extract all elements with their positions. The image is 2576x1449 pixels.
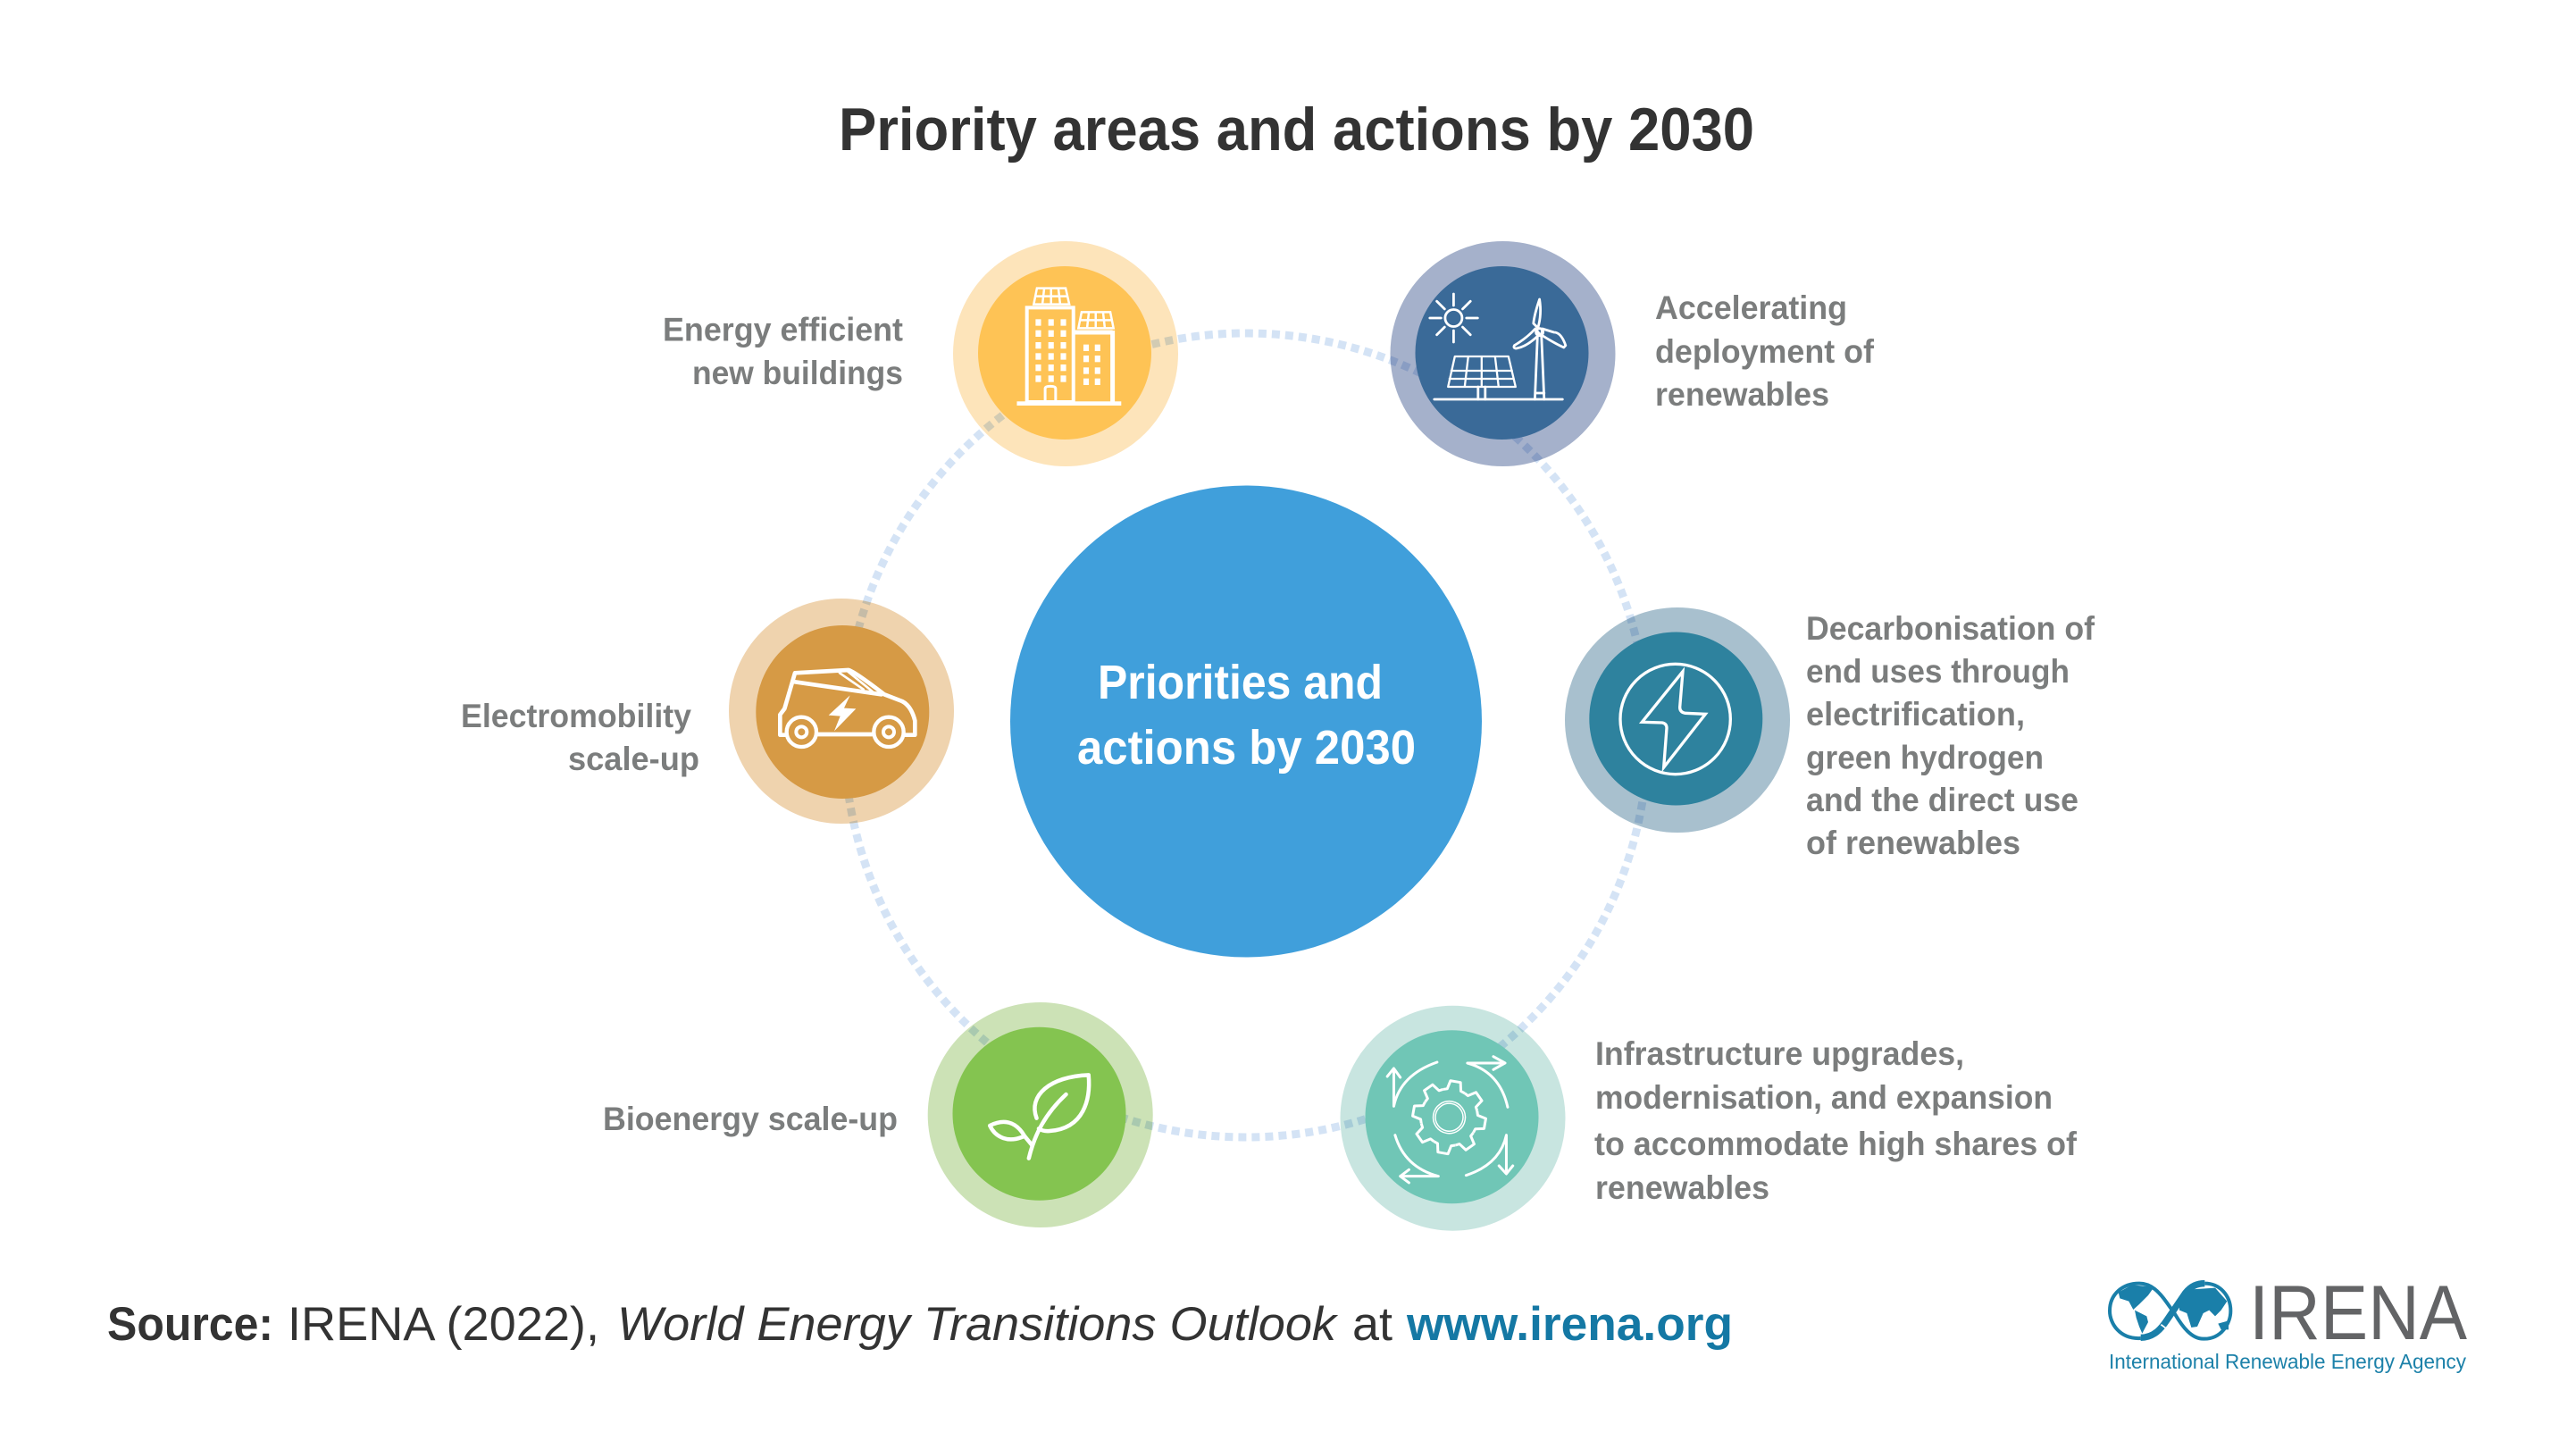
label: infrastructure upgrades: renewables xyxy=(1595,1169,1769,1206)
label: energy efficient new buildings: new buildings xyxy=(692,355,903,391)
source line: at xyxy=(1352,1298,1393,1351)
label: infrastructure upgrades: Infrastructure upgrades, xyxy=(1595,1035,1964,1072)
label: decarbonisation of end uses: green hydrogen xyxy=(1806,740,2044,775)
icon: electric car xyxy=(780,670,915,747)
source line: World Energy Transitions Outlook xyxy=(617,1298,1339,1351)
node: electromobility scale-up xyxy=(729,599,954,824)
label: infrastructure upgrades: modernisation, and expansion xyxy=(1595,1079,2053,1116)
source line xyxy=(107,1298,1733,1351)
label: decarbonisation of end uses: and the direct use xyxy=(1806,782,2078,818)
source line: www.irena.org xyxy=(1406,1298,1733,1351)
node: decarbonisation of end uses xyxy=(1565,607,1790,833)
central circle: priorities and actions: Priorities and xyxy=(1098,656,1383,709)
icon: lightning bolt in circle xyxy=(1620,664,1730,775)
logo: IRENA xyxy=(2109,1270,2468,1373)
label: accelerating deployment of renewables xyxy=(1655,289,1875,413)
label: decarbonisation of end uses xyxy=(1806,610,2095,861)
icon: infinity globe emblem xyxy=(2110,1284,2230,1339)
label: accelerating deployment of renewables: renewables xyxy=(1655,376,1829,413)
label: decarbonisation of end uses: of renewables xyxy=(1806,825,2020,861)
label: decarbonisation of end uses: Decarbonisation of xyxy=(1806,610,2095,647)
label: accelerating deployment of renewables: deployment of xyxy=(1655,333,1875,370)
icon: sun, solar panel and wind turbine xyxy=(1430,294,1566,399)
label: energy efficient new buildings xyxy=(663,311,903,391)
label: decarbonisation of end uses: end uses through xyxy=(1806,653,2070,690)
label: infrastructure upgrades: to accommodate high shares of xyxy=(1594,1126,2078,1162)
node: energy efficient new buildings xyxy=(953,241,1178,466)
dotted ring connecting the priority circles xyxy=(844,333,1648,1137)
icon: leaf sprout xyxy=(990,1075,1089,1159)
label: electromobility scale-up: Electromobility xyxy=(461,698,691,734)
central circle: priorities and actions: actions by 2030 xyxy=(1077,721,1416,775)
logo: IRENA: International Renewable Energy Agency xyxy=(2109,1350,2466,1373)
source line: Source: xyxy=(107,1298,273,1351)
logo: IRENA: IRENA xyxy=(2249,1270,2468,1356)
node: infrastructure upgrades xyxy=(1340,1006,1565,1231)
label: energy efficient new buildings: Energy efficient xyxy=(663,311,903,348)
label: electromobility scale-up: scale-up xyxy=(568,741,699,777)
label: bioenergy scale-up: Bioenergy scale-up xyxy=(603,1101,898,1137)
title: Priority areas and actions by 2030 xyxy=(839,96,1754,163)
label: infrastructure upgrades xyxy=(1594,1035,2078,1206)
label: accelerating deployment of renewables: Accelerating xyxy=(1655,289,1847,326)
label: electromobility scale-up xyxy=(461,698,699,777)
central circle: priorities and actions xyxy=(1010,486,1482,958)
node: accelerating deployment of renewables xyxy=(1390,241,1615,466)
label: decarbonisation of end uses: electrification, xyxy=(1806,696,2025,733)
source line: IRENA (2022), xyxy=(288,1298,599,1351)
icon: buildings with solar panels xyxy=(1016,289,1121,406)
icon: gear with circular arrows xyxy=(1387,1057,1513,1183)
node: bioenergy scale-up xyxy=(928,1002,1153,1227)
